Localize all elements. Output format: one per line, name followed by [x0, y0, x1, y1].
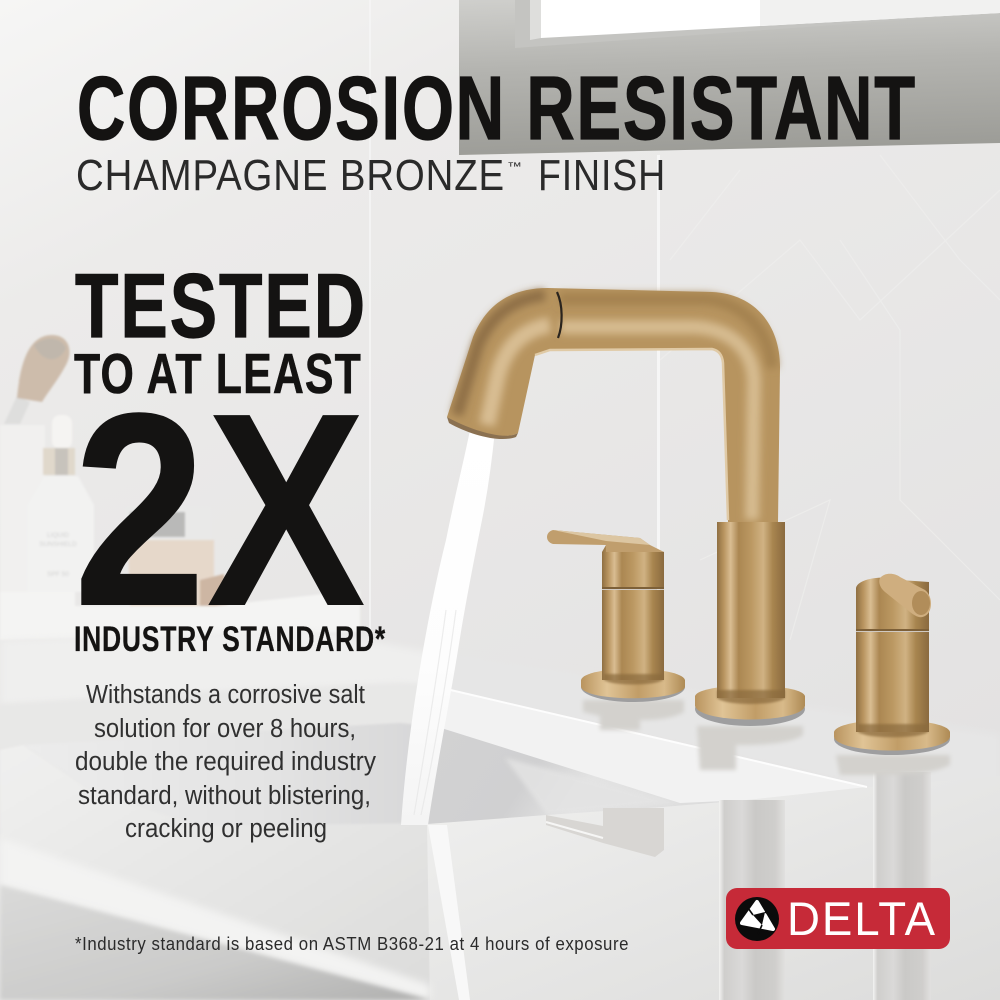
basin left — [23, 723, 440, 826]
subtitle: FINISH — [538, 151, 666, 200]
description paragraph: standard, without blistering, — [78, 782, 371, 810]
sink rim — [0, 683, 440, 750]
headline: to at least: TO AT LEAST — [74, 342, 362, 406]
centre riser and base — [695, 522, 805, 726]
description paragraph: Withstands a corrosive salt — [86, 681, 365, 709]
faucet reflections — [428, 700, 950, 1000]
blurred cosmetics on the shelf — [0, 335, 360, 640]
logo: Delta — [726, 888, 950, 949]
icon: serum bottle: SPF 50 — [47, 571, 69, 578]
spout — [447, 288, 780, 522]
icon: serum bottle: LIQUID — [47, 532, 69, 539]
left handle — [547, 530, 685, 702]
under lip interior — [427, 727, 747, 825]
icon: Delta triangle mark — [735, 897, 779, 941]
counter lip — [438, 688, 867, 803]
right handle — [834, 574, 950, 755]
vanity front right — [427, 776, 1000, 1000]
lower cabinet wedge — [0, 885, 430, 1000]
icon: serum bottle — [27, 415, 94, 592]
counter and sink — [0, 628, 1000, 1000]
description paragraph — [75, 681, 376, 843]
headline: 2X: 2X — [73, 356, 367, 664]
headline: industry standard: INDUSTRY STANDARD* — [74, 620, 386, 659]
subtitle: ™ — [507, 161, 522, 173]
bright edge band — [0, 838, 430, 1000]
footnote: *Industry standard is based on ASTM B368-21 at 4 hours of exposure — [75, 934, 629, 954]
icon: makeup brush — [4, 335, 70, 424]
icon: cream jar — [126, 507, 228, 607]
counter top right — [442, 655, 1000, 1000]
description paragraph: double the required industry — [75, 748, 376, 776]
shelf — [0, 590, 360, 640]
description paragraph: solution for over 8 hours, — [94, 715, 356, 743]
description paragraph: cracking or peeling — [125, 815, 327, 843]
subtitle: CHAMPAGNE BRONZE — [76, 151, 505, 200]
headline: tested: TESTED — [75, 256, 367, 357]
counter left front — [0, 745, 430, 1000]
faucet — [447, 288, 950, 755]
mirror frame — [459, 0, 1000, 155]
logo: Delta: DELTA — [787, 892, 937, 945]
icon: serum bottle: SUNSHIELD — [39, 541, 77, 548]
counter surface left and centre — [0, 628, 445, 705]
icon: cup behind bottle — [0, 425, 45, 595]
water stream — [401, 430, 495, 825]
